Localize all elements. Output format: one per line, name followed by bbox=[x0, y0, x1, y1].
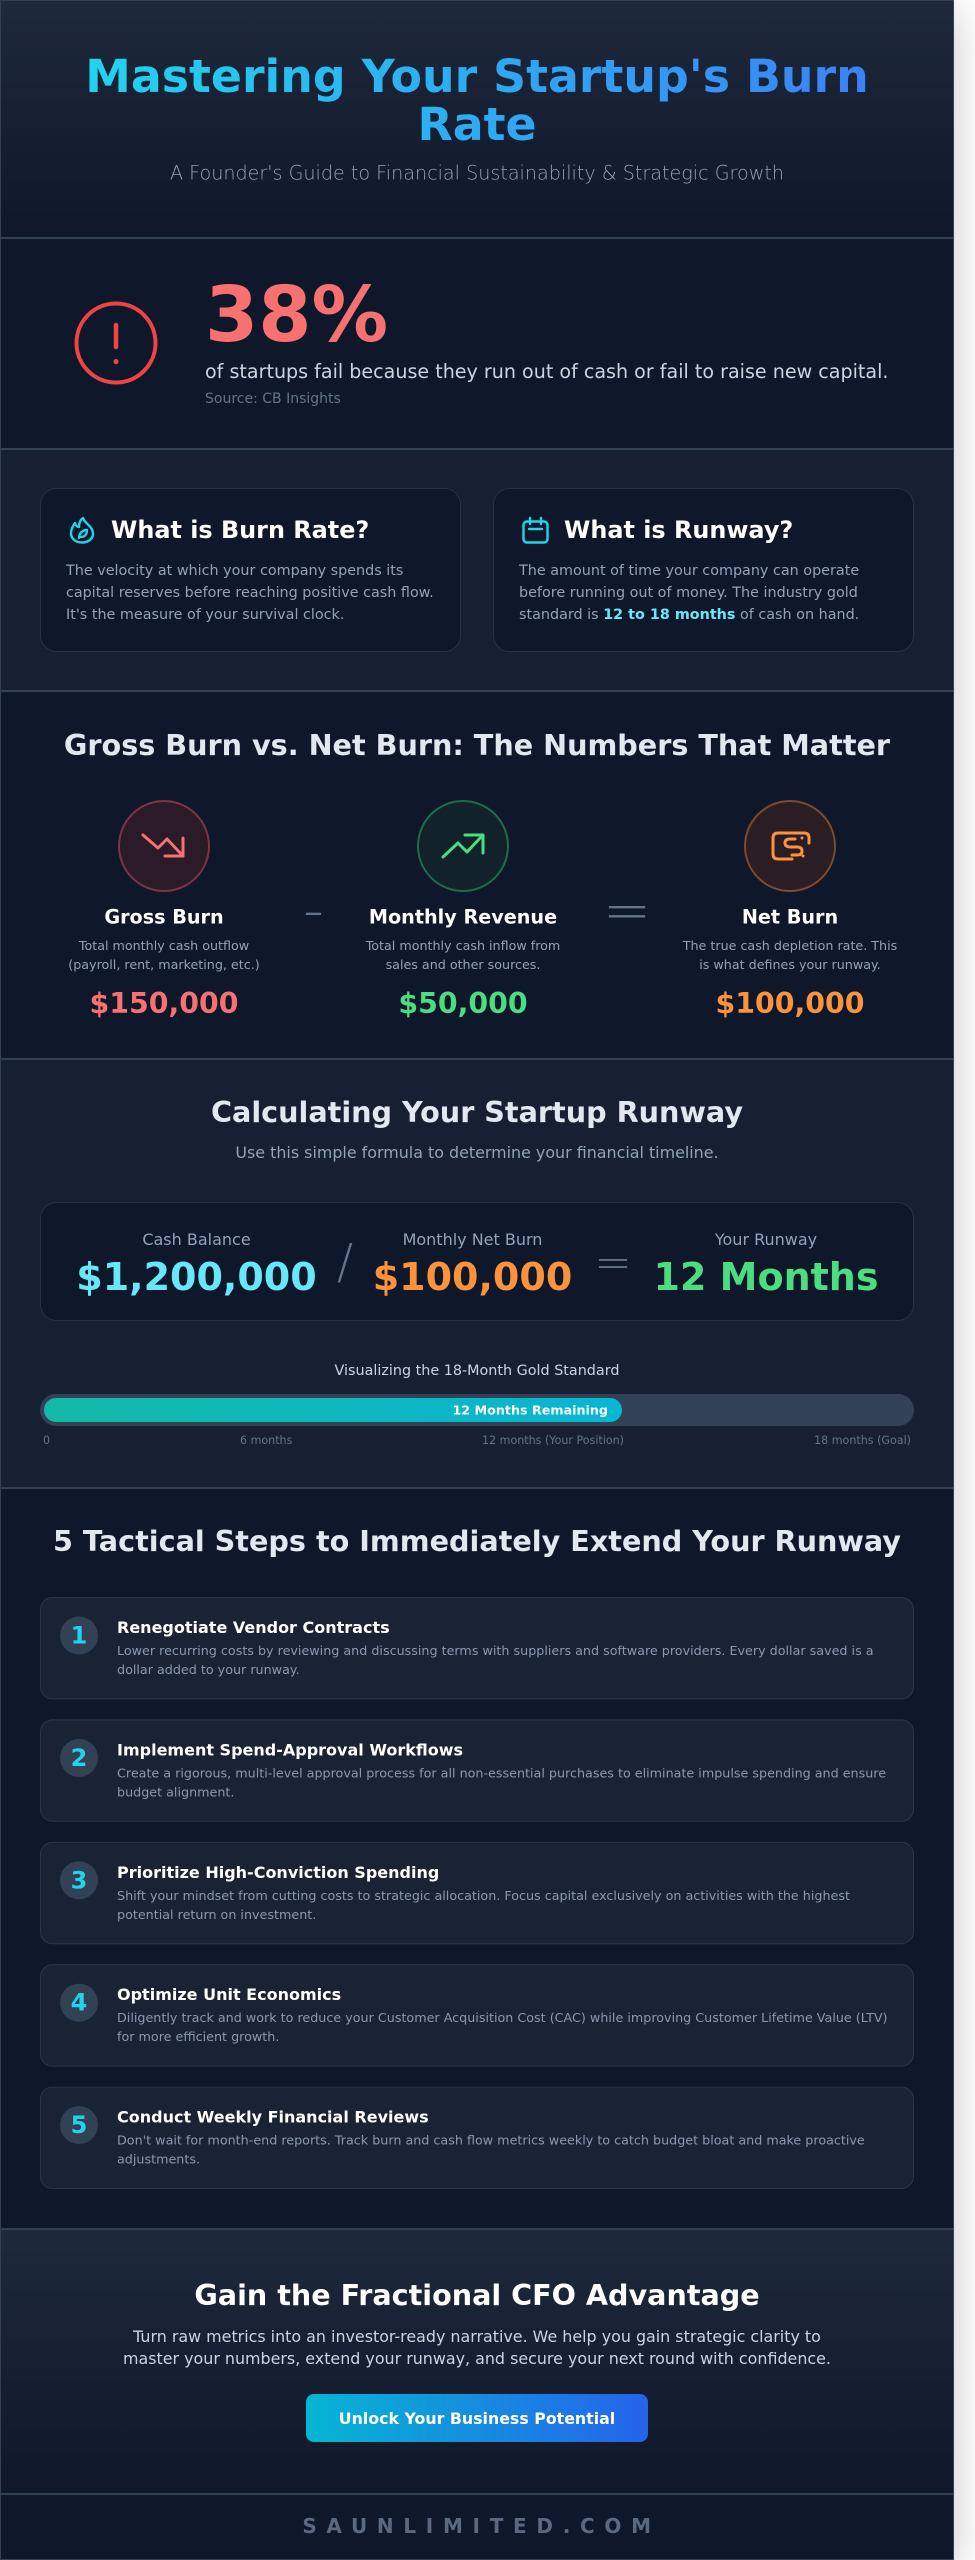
step 2: Create a rigorous, multi-level approval process for all non-essential purchases to eliminate impulse spending and ensure bbox=[117, 1765, 886, 1780]
title: Mastering Your Startup's Burn bbox=[85, 49, 869, 103]
cta text: master your numbers, extend your runway, and secure your next round with confidence. bbox=[123, 2349, 831, 2368]
formula: your runway bbox=[654, 1230, 878, 1299]
panel: statistic bbox=[0, 238, 954, 449]
card heading: What is Runway? bbox=[564, 516, 793, 544]
metric description: The true cash depletion rate. This bbox=[682, 938, 897, 953]
tick labels: 12 months (Your Position) bbox=[482, 1434, 624, 1447]
step 2 bbox=[40, 1720, 914, 1821]
tick labels: 0 bbox=[43, 1434, 50, 1447]
step 5: Conduct Weekly Financial Reviews bbox=[117, 2108, 429, 2127]
card text: capital reserves before reaching positive cash flow. bbox=[66, 585, 434, 601]
metric description: (payroll, rent, marketing, etc.) bbox=[68, 957, 260, 972]
statistic description: of startups fail because they run out of cash or fail to raise new capital. bbox=[205, 360, 888, 383]
formula: cash balance: $1,200,000 bbox=[76, 1255, 317, 1299]
formula: your runway: 12 Months bbox=[654, 1255, 878, 1299]
metric description: sales and other sources. bbox=[386, 957, 540, 972]
icon: calendar bbox=[524, 518, 548, 542]
big number: 38% bbox=[205, 271, 388, 360]
step 5 bbox=[40, 2087, 914, 2188]
formula: your runway: Your Runway bbox=[714, 1230, 817, 1249]
panel: gross vs net burn bbox=[0, 690, 954, 1058]
icon: wallet bbox=[745, 801, 835, 891]
step 4: Optimize Unit Economics bbox=[117, 1985, 341, 2004]
section heading: 5 Tactical Steps to Immediately Extend Your Runway bbox=[53, 1524, 901, 1558]
formula box bbox=[40, 1202, 914, 1320]
source: Source: CB Insights bbox=[205, 391, 341, 407]
operator: equals: = bbox=[594, 1236, 632, 1289]
operator: minus: - bbox=[303, 876, 324, 944]
step 1: 1 bbox=[71, 1622, 87, 1650]
step 2: 2 bbox=[71, 1744, 87, 1772]
operator: divide: / bbox=[337, 1234, 353, 1290]
step 5: 5 bbox=[71, 2111, 87, 2139]
step 3: 3 bbox=[71, 1866, 87, 1894]
step 3 bbox=[40, 1842, 914, 1944]
section heading: Gross Burn vs. Net Burn: The Numbers That Matter bbox=[64, 728, 891, 762]
card heading: What is Burn Rate? bbox=[111, 516, 369, 544]
metric name: Monthly Revenue bbox=[369, 906, 557, 928]
step 4: Diligently track and work to reduce your Customer Acquisition Cost (CAC) while improving Customer Lifetime Value (LTV) bbox=[117, 2010, 888, 2025]
metric value: $100,000 bbox=[715, 987, 865, 1020]
metric: net burn bbox=[682, 801, 897, 1020]
icon: trending down bbox=[119, 801, 209, 891]
step 3: potential return on investment. bbox=[117, 1907, 316, 1922]
step 3: Shift your mindset from cutting costs to strategic allocation. Focus capital exclusively on activities with the highest bbox=[117, 1888, 850, 1903]
step 2: budget alignment. bbox=[117, 1784, 234, 1799]
formula: cash balance: Cash Balance bbox=[142, 1230, 251, 1249]
panel: runway calculator bbox=[0, 1058, 954, 1487]
card text: The amount of time your company can operate bbox=[518, 563, 859, 579]
card text: before running out of money. The industry gold bbox=[519, 585, 858, 601]
section heading: Calculating Your Startup Runway bbox=[211, 1095, 743, 1129]
step 1: Lower recurring costs by reviewing and discussing terms with suppliers and software providers. Every dollar saved is a bbox=[117, 1643, 874, 1658]
tick labels bbox=[43, 1434, 911, 1447]
cta button bbox=[306, 2394, 648, 2442]
metric description: is what defines your runway. bbox=[699, 957, 881, 972]
card text: 12 to 18 months of cash on hand. bbox=[603, 607, 859, 623]
subtitle: A Founder's Guide to Financial Sustainability & Strategic Growth bbox=[170, 162, 784, 184]
tick labels: 18 months (Goal) bbox=[814, 1434, 911, 1447]
icon: flame bbox=[71, 518, 93, 542]
metric value: $150,000 bbox=[89, 987, 239, 1020]
formula: monthly net burn: Monthly Net Burn bbox=[403, 1230, 542, 1249]
progress chart bbox=[40, 1363, 914, 1447]
cta text: Turn raw metrics into an investor-ready narrative. We help you gain strategic clarity to bbox=[132, 2327, 821, 2346]
metric value: $50,000 bbox=[398, 987, 528, 1020]
step 4 bbox=[40, 1965, 914, 2066]
panel: call to action bbox=[0, 2228, 954, 2493]
metric name: Net Burn bbox=[742, 906, 838, 928]
icon: trending up bbox=[418, 801, 508, 891]
step 1: dollar added to your runway. bbox=[117, 1662, 300, 1677]
footer bbox=[0, 2493, 954, 2560]
card text: The velocity at which your company spends its bbox=[65, 563, 403, 579]
operator: equals: = bbox=[603, 876, 651, 944]
card: burn rate bbox=[40, 488, 460, 652]
metric description: Total monthly cash outflow bbox=[78, 938, 249, 953]
section subheading: Use this simple formula to determine your financial timeline. bbox=[235, 1143, 719, 1162]
chart label: Visualizing the 18-Month Gold Standard bbox=[335, 1363, 619, 1379]
step 5: adjustments. bbox=[117, 2152, 200, 2167]
step 2: Implement Spend-Approval Workflows bbox=[117, 1740, 463, 1759]
card text: standard is bbox=[519, 607, 603, 623]
card: runway bbox=[494, 488, 914, 652]
title: Rate bbox=[417, 97, 537, 151]
step 1: Renegotiate Vendor Contracts bbox=[117, 1618, 390, 1637]
header panel bbox=[0, 0, 954, 238]
tick labels: 6 months bbox=[240, 1434, 293, 1447]
cta button: Unlock Your Business Potential bbox=[339, 2409, 615, 2428]
progress fill bbox=[44, 1398, 622, 1422]
panel: definitions bbox=[0, 449, 954, 690]
cta heading: Gain the Fractional CFO Advantage bbox=[194, 2278, 760, 2312]
step 4: 4 bbox=[71, 1989, 87, 2017]
metric name: Gross Burn bbox=[104, 906, 224, 928]
metric: monthly revenue bbox=[365, 801, 560, 1020]
step 3: Prioritize High-Conviction Spending bbox=[117, 1863, 439, 1882]
card text: It's the measure of your survival clock. bbox=[66, 607, 344, 623]
step 4: for more efficient growth. bbox=[117, 2029, 279, 2044]
step 5: Don't wait for month-end reports. Track burn and cash flow metrics weekly to catch budget bloat and make proactive bbox=[117, 2133, 865, 2148]
metric: gross burn bbox=[68, 801, 260, 1020]
progress fill: 12 Months Remaining bbox=[452, 1402, 608, 1418]
progress track bbox=[40, 1394, 914, 1426]
footer: SAUNLIMITED.COM bbox=[302, 2514, 661, 2538]
formula: monthly net burn bbox=[373, 1230, 572, 1299]
formula: monthly net burn: $100,000 bbox=[373, 1255, 572, 1299]
panel: tactical steps bbox=[0, 1487, 954, 2228]
formula: cash balance bbox=[76, 1230, 317, 1299]
icon: alert circle bbox=[76, 304, 156, 382]
metric description: Total monthly cash inflow from bbox=[365, 938, 560, 953]
step 1 bbox=[40, 1598, 914, 1699]
